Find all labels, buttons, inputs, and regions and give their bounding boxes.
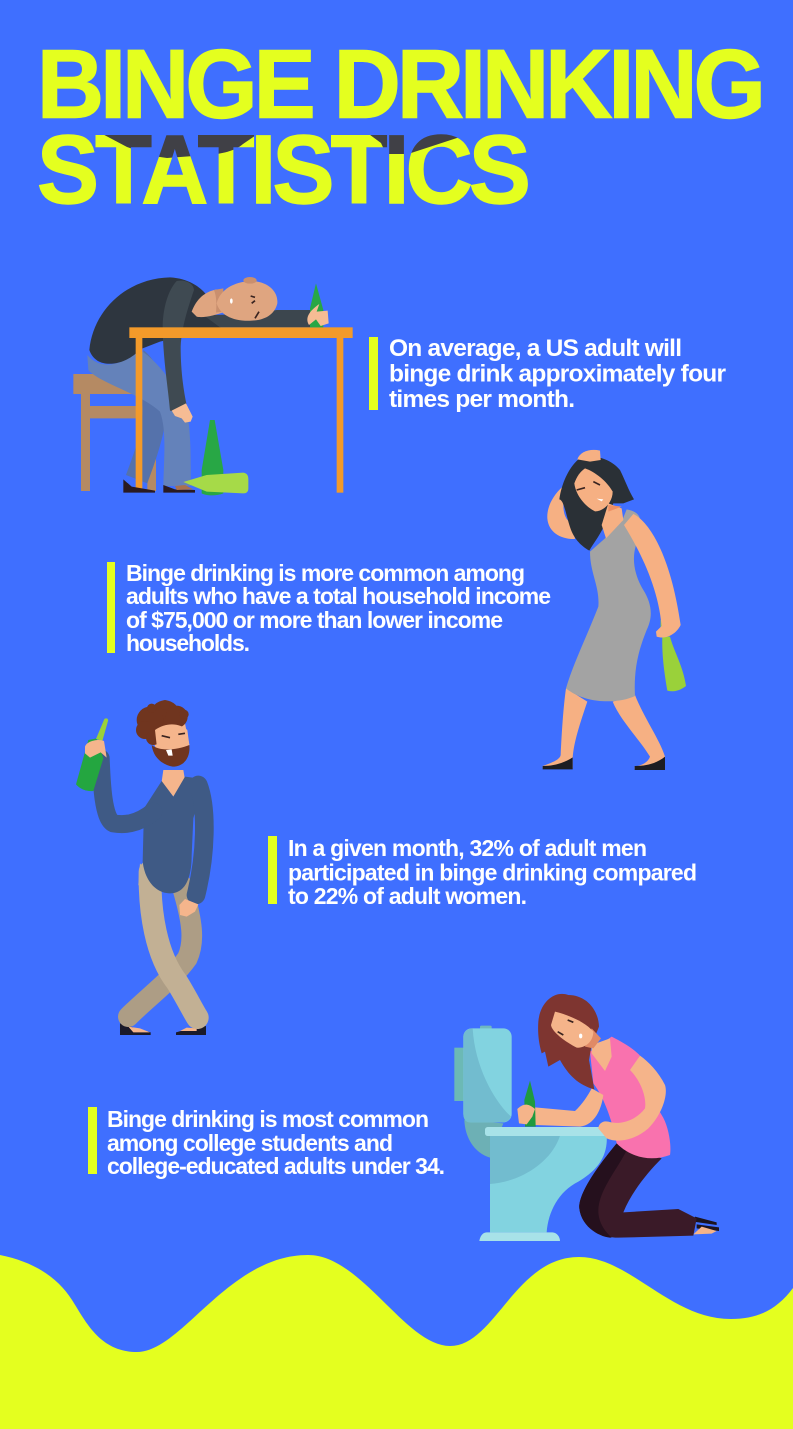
text block 2: Binge drinking is more common among [126,560,525,586]
text block 2: adults who have a total household income [126,583,551,609]
illustration: woman sick at toilet [454,994,719,1241]
title [37,30,762,224]
text block 4: among college students and [107,1130,393,1156]
text block 3 [288,835,697,909]
title: STATISTICS [37,115,527,224]
accent bar 1 [369,337,378,410]
text block 2: households. [126,630,250,656]
title: BINGE DRINKING [37,30,762,138]
text block 4: Binge drinking is most common [107,1106,429,1132]
text block 3: participated in binge drinking compared [288,860,697,886]
illustration: man slumped over table [73,277,353,495]
text block 4: college-educated adults under 34. [107,1153,445,1179]
text block 1: times per month. [389,386,575,413]
text block 2 [126,560,551,656]
accent bar 3 [268,836,277,904]
accent bar 2 [107,562,115,653]
text block 4 [107,1106,445,1179]
text block 3: to 22% of adult women. [288,883,527,909]
text block 1: On average, a US adult will [389,335,682,362]
text block 2: of $75,000 or more than lower income [126,607,503,633]
accent bar 4 [88,1107,97,1174]
text block 1 [389,335,726,413]
text block 1: binge drink approximately four [389,360,726,388]
wave footer [0,1255,793,1429]
illustration: bearded man with bottle [76,700,206,1035]
text block 3: In a given month, 32% of adult men [288,835,647,861]
illustration: woman holding her head and a bottle [543,450,686,770]
